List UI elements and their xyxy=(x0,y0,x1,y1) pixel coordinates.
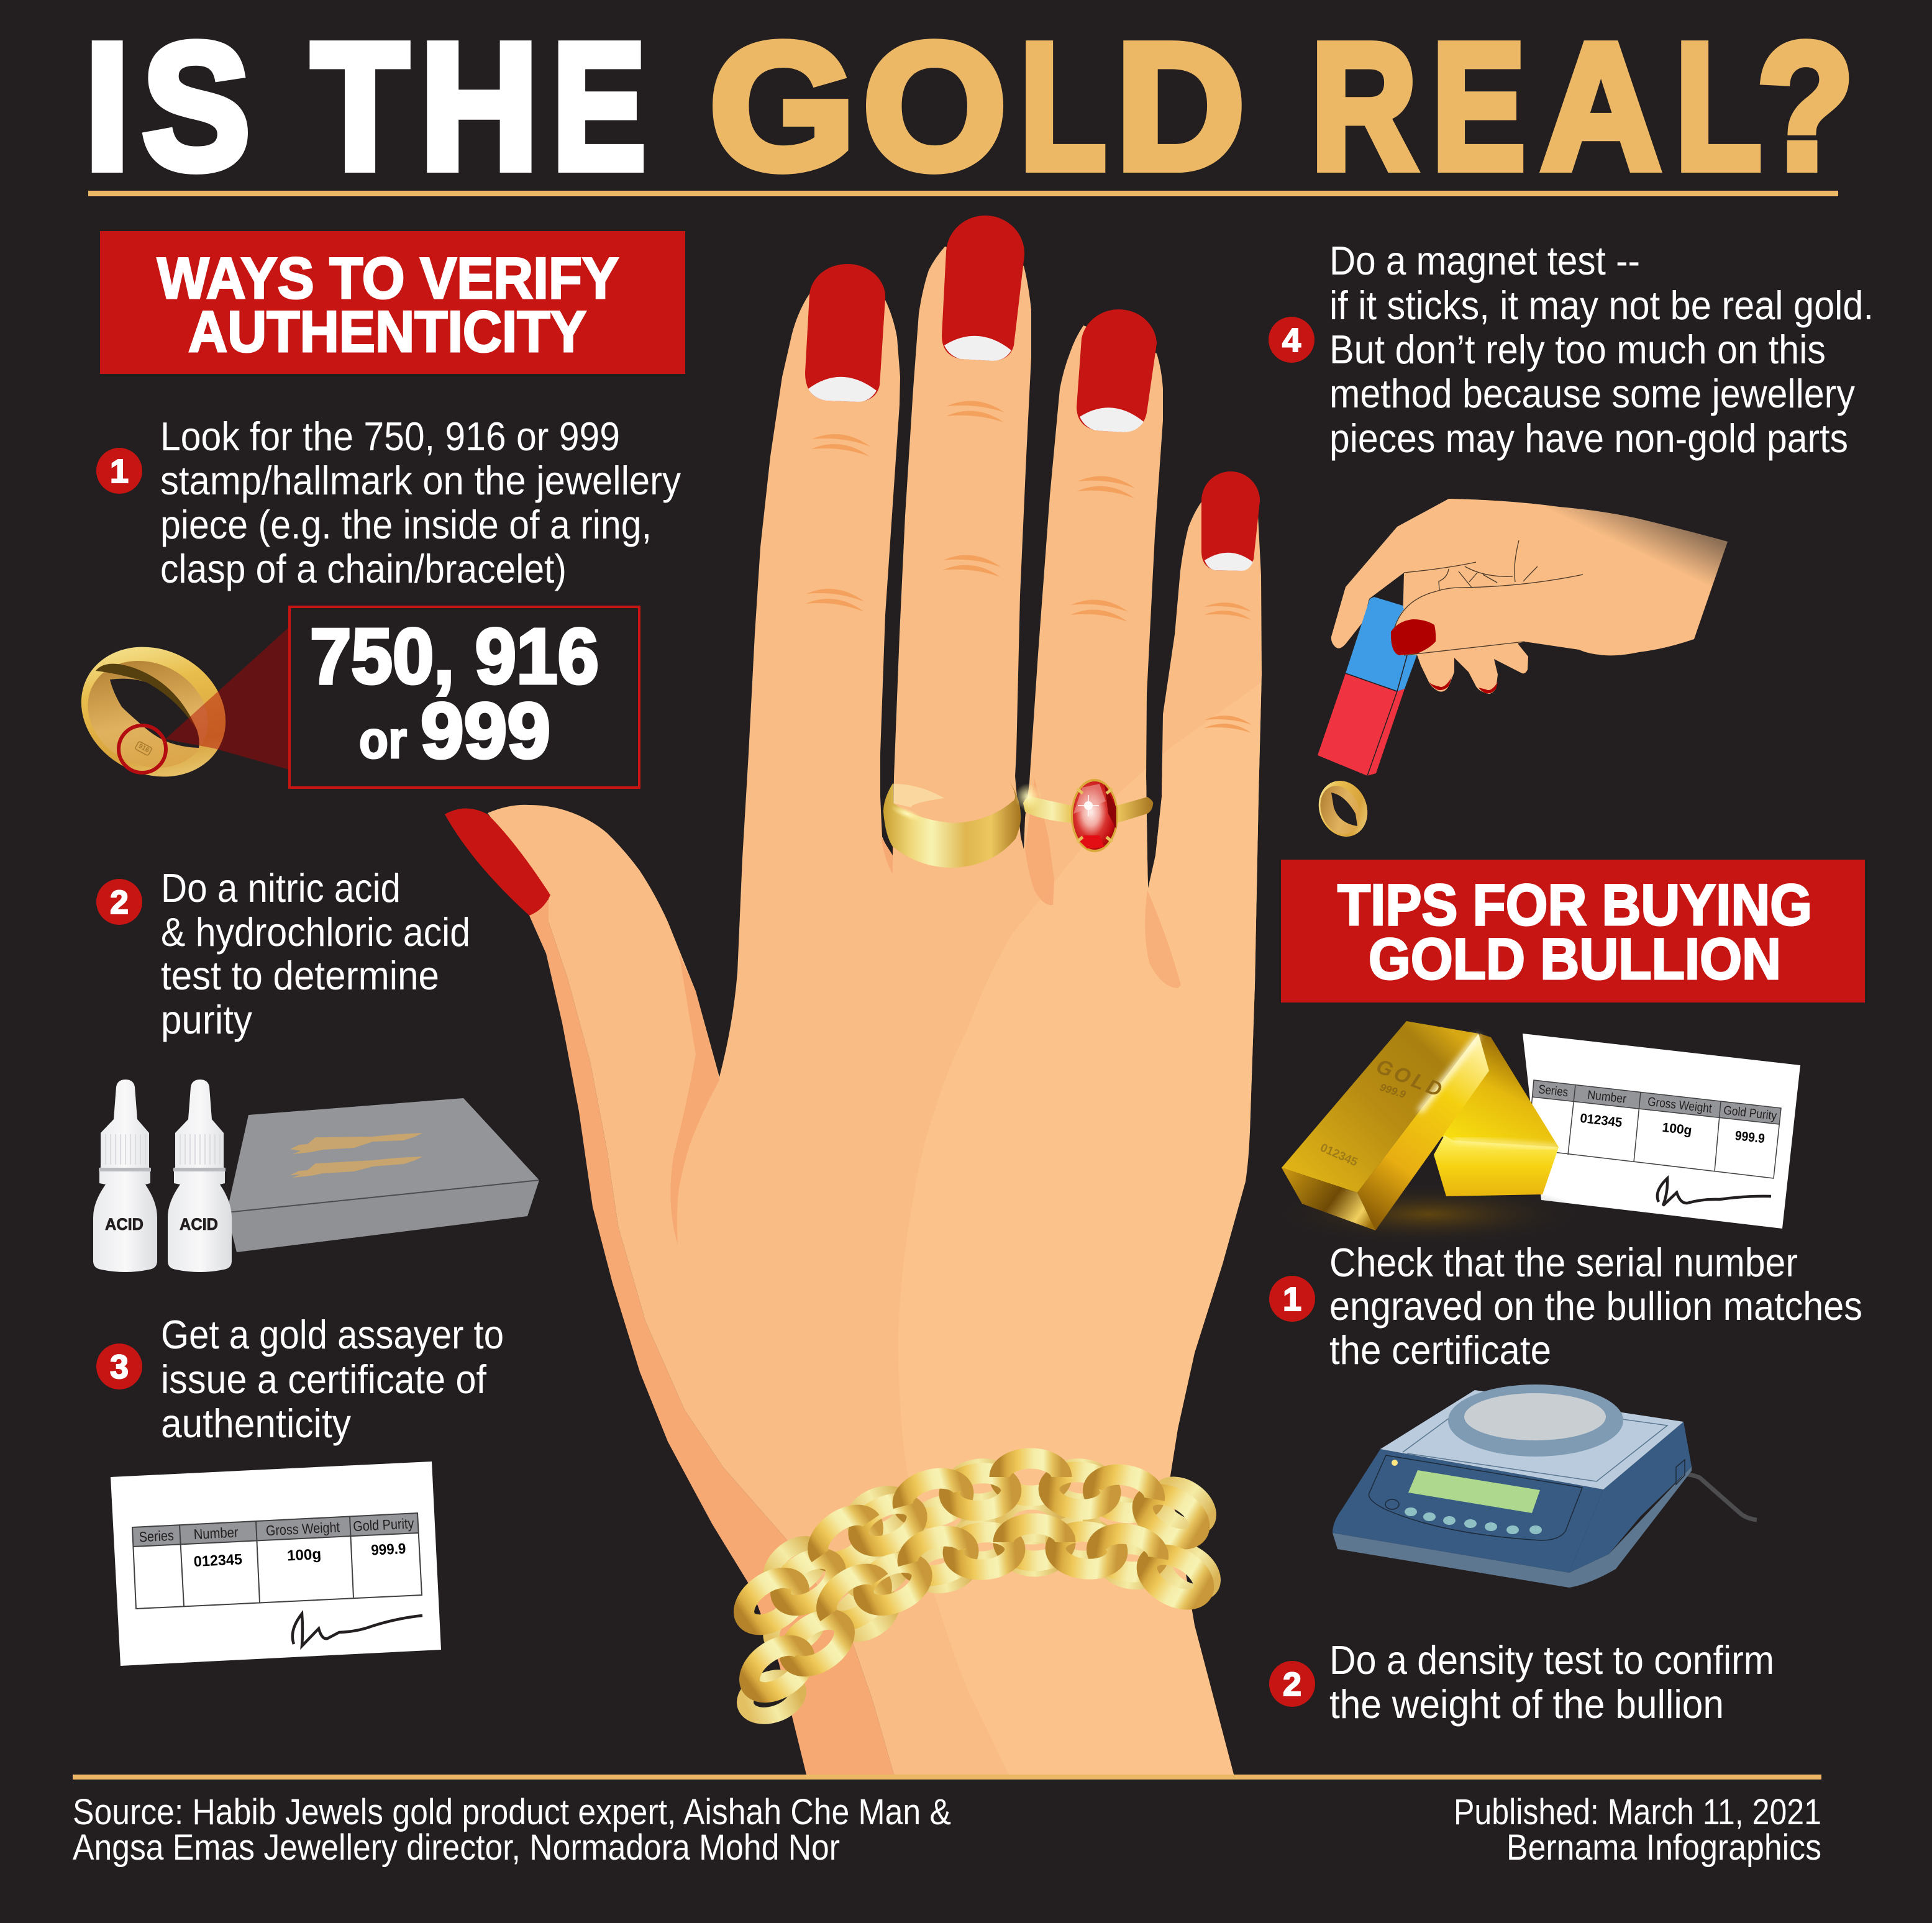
back bar top xyxy=(1429,1034,1559,1147)
certificate table: Gross Weight xyxy=(265,1519,340,1539)
certificate table: Series xyxy=(1538,1083,1569,1099)
nail tip: middle xyxy=(944,336,1011,361)
signature xyxy=(1657,1178,1771,1206)
step 1 text: stamp/hallmark on the jewellery xyxy=(160,458,681,503)
body front xyxy=(1333,1449,1603,1573)
hand lines xyxy=(1395,540,1583,655)
gold chain bracelet xyxy=(736,1458,1220,1722)
nail tip: pinky xyxy=(1205,553,1253,571)
magnet xyxy=(1318,597,1417,776)
nail tip: index xyxy=(808,377,877,402)
title: O xyxy=(863,7,1006,207)
nail tips xyxy=(1429,677,1498,694)
tips step 2 text: the weight of the bullion xyxy=(1329,1681,1724,1727)
icon: acid bottle 2: ACID xyxy=(180,1215,218,1234)
certificate table: 012345 xyxy=(1579,1111,1623,1130)
top plate xyxy=(1380,1390,1684,1489)
footer rule xyxy=(73,1775,1821,1780)
nail: thumb xyxy=(445,809,550,916)
tips step 2 text: 2 xyxy=(1283,1666,1301,1703)
step 2 text: test to determine xyxy=(161,953,439,998)
icon: gold ring with hallmark xyxy=(59,622,289,801)
nail: pinky xyxy=(1201,471,1260,571)
nail: ring finger xyxy=(1077,309,1157,432)
publication text xyxy=(1454,1792,1821,1868)
icon: digital scale xyxy=(1333,1384,1757,1588)
callout: 750, 916 or 999: 999 xyxy=(421,687,550,775)
certificate table: Gold Purity xyxy=(1723,1104,1777,1123)
front bar top xyxy=(1282,1021,1479,1193)
title: ? xyxy=(1757,6,1854,206)
title: T xyxy=(312,6,408,207)
icon: small gold ring xyxy=(1311,773,1375,844)
step 3 text: Get a gold assayer to xyxy=(161,1312,504,1357)
step 2 text: Do a nitric acid xyxy=(161,865,401,911)
title: I xyxy=(85,7,130,207)
title: H xyxy=(420,6,539,207)
wide gold ring xyxy=(883,781,1021,868)
certificate table: 999.9 xyxy=(1734,1129,1766,1146)
cup links xyxy=(772,1470,1211,1676)
step 2 text: purity xyxy=(161,997,252,1042)
hand shadow side xyxy=(529,899,894,1775)
step 1 text xyxy=(96,414,681,591)
index shadow xyxy=(881,837,893,874)
title: D xyxy=(1116,6,1245,207)
tips step 1 text: engraved on the bullion matches xyxy=(1329,1283,1862,1329)
base strip xyxy=(1333,1466,1692,1588)
step 4 text: Do a magnet test -- xyxy=(1329,238,1640,283)
hand back xyxy=(1331,499,1728,694)
icon: gold bars: 012345 xyxy=(1318,1141,1360,1170)
nail: middle xyxy=(942,216,1024,361)
icon: gold bars: 999.9 xyxy=(1378,1081,1408,1101)
title: R xyxy=(1311,7,1417,207)
signature xyxy=(293,1614,422,1646)
ruby ring xyxy=(1014,779,1153,852)
step 2 text: 2 xyxy=(110,884,129,921)
publication text: Bernama Infographics xyxy=(1506,1827,1821,1868)
certificate table: 999.9 xyxy=(371,1540,406,1559)
source text: Angsa Emas Jewellery director, Normadora Mohd Nor xyxy=(73,1827,840,1868)
thumb xyxy=(1395,575,1615,655)
certificate table: Gross Weight xyxy=(1647,1095,1713,1116)
step 4 text: But don’t rely too much on this xyxy=(1329,327,1826,372)
heading: tips for buying gold bullion: TIPS FOR BUYING xyxy=(1337,872,1812,937)
title: E xyxy=(552,6,646,206)
callout: 750, 916 or 999 xyxy=(289,607,639,788)
publication text: Published: March 11, 2021 xyxy=(1454,1792,1821,1832)
title: L xyxy=(1020,6,1106,207)
body right xyxy=(1569,1422,1692,1573)
heading: ways to verify authenticity: WAYS TO VERIFY xyxy=(157,245,619,311)
display xyxy=(1408,1470,1540,1513)
cable xyxy=(1679,1475,1757,1520)
step 4 text: method because some jewellery xyxy=(1329,371,1855,416)
nail: index xyxy=(805,264,885,402)
step 4 text: if it sticks, it may not be real gold. xyxy=(1329,283,1874,328)
title: E xyxy=(1432,6,1526,206)
step 1 text: 1 xyxy=(110,453,129,490)
thumb crease xyxy=(670,953,719,1245)
icon: hand holding magnet xyxy=(1318,499,1728,776)
pan xyxy=(1448,1384,1623,1457)
tips step 1 text: 1 xyxy=(1283,1281,1301,1318)
bar highlight xyxy=(1419,1036,1479,1112)
nail tip: ring finger xyxy=(1080,407,1144,432)
certificate table: 012345 xyxy=(193,1551,242,1570)
icon: acid bottle 2 xyxy=(168,1080,232,1272)
icon: acid bottle 1 xyxy=(93,1080,157,1272)
icon: gold bars xyxy=(1274,1021,1584,1245)
heading: tips for buying gold bullion: GOLD BULLION xyxy=(1369,926,1781,991)
glow under bars xyxy=(1274,1183,1584,1245)
title: L xyxy=(1675,6,1762,207)
heading: ways to verify authenticity: AUTHENTICITY xyxy=(188,299,586,364)
power port xyxy=(1676,1460,1685,1484)
pinky shadow xyxy=(1145,890,1181,988)
step 3 text: authenticity xyxy=(161,1401,351,1446)
step 3 text: issue a certificate of xyxy=(161,1357,487,1402)
knuckle creases xyxy=(806,401,1252,733)
certificate table: Number xyxy=(1587,1088,1627,1106)
callout: 750, 916 or 999: or xyxy=(359,711,407,769)
title xyxy=(85,6,1854,207)
step 3 text: 3 xyxy=(110,1348,129,1386)
certificate table: Number xyxy=(193,1524,239,1542)
buttons xyxy=(1405,1507,1542,1534)
step 1 text: clasp of a chain/bracelet) xyxy=(160,546,567,591)
finger shadows xyxy=(1025,778,1054,905)
step 4 text xyxy=(1269,238,1874,461)
title rule xyxy=(88,191,1838,196)
tips step 2 text xyxy=(1269,1637,1774,1727)
overlapping link tops xyxy=(736,1458,1161,1687)
step 1 text: piece (e.g. the inside of a ring, xyxy=(160,502,652,547)
heading: tips for buying gold bullion xyxy=(1281,860,1865,1002)
step 2 text: & hydrochloric acid xyxy=(161,909,470,955)
back bar front xyxy=(1434,1135,1559,1196)
step 4 text: pieces may have non-gold parts xyxy=(1329,416,1848,461)
step 4 text: 4 xyxy=(1282,322,1301,359)
certificate table xyxy=(132,1513,422,1609)
tips step 1 text: the certificate xyxy=(1329,1327,1551,1373)
title: A xyxy=(1541,7,1661,207)
front bar side xyxy=(1357,1034,1489,1230)
certificate table xyxy=(1528,1080,1781,1178)
tips step 1 text xyxy=(1269,1240,1862,1373)
certificate table: 100g xyxy=(1661,1121,1693,1138)
step 2 text xyxy=(96,865,470,1042)
front bar end xyxy=(1282,1168,1375,1230)
icon: touchstone slab xyxy=(227,1098,539,1252)
thumb nail xyxy=(1391,619,1436,655)
callout: 750, 916 or 999: 750, 916 xyxy=(310,612,599,700)
tips step 2 text: Do a density test to confirm xyxy=(1329,1637,1774,1683)
title: G xyxy=(709,6,855,207)
icon: acid bottle 1: ACID xyxy=(105,1215,144,1234)
certificate table: 100g xyxy=(286,1546,322,1565)
certificate table: Series xyxy=(139,1527,174,1545)
back links xyxy=(740,1465,1220,1722)
arch links xyxy=(736,1458,1161,1702)
heading: ways to verify authenticity xyxy=(100,231,685,374)
step 3 text xyxy=(96,1312,504,1446)
engraving: GOLD xyxy=(1373,1054,1448,1102)
certificate xyxy=(111,1462,441,1666)
hand base skin xyxy=(488,247,1262,1775)
certificate 2 xyxy=(1523,1034,1800,1229)
illustration: hand xyxy=(445,216,1267,1775)
lighter back of hand xyxy=(1146,682,1262,1775)
step 1 text: Look for the 750, 916 or 999 xyxy=(160,414,620,459)
source text: Source: Habib Jewels gold product expert, Aishah Che Man & xyxy=(73,1792,951,1832)
icon: gold ring with hallmark: 916 xyxy=(137,742,150,754)
title: S xyxy=(142,7,250,207)
tips step 1 text: Check that the serial number xyxy=(1329,1240,1798,1285)
certificate table: Gold Purity xyxy=(353,1515,414,1534)
source text xyxy=(73,1792,951,1868)
panel outline xyxy=(1369,1455,1582,1540)
